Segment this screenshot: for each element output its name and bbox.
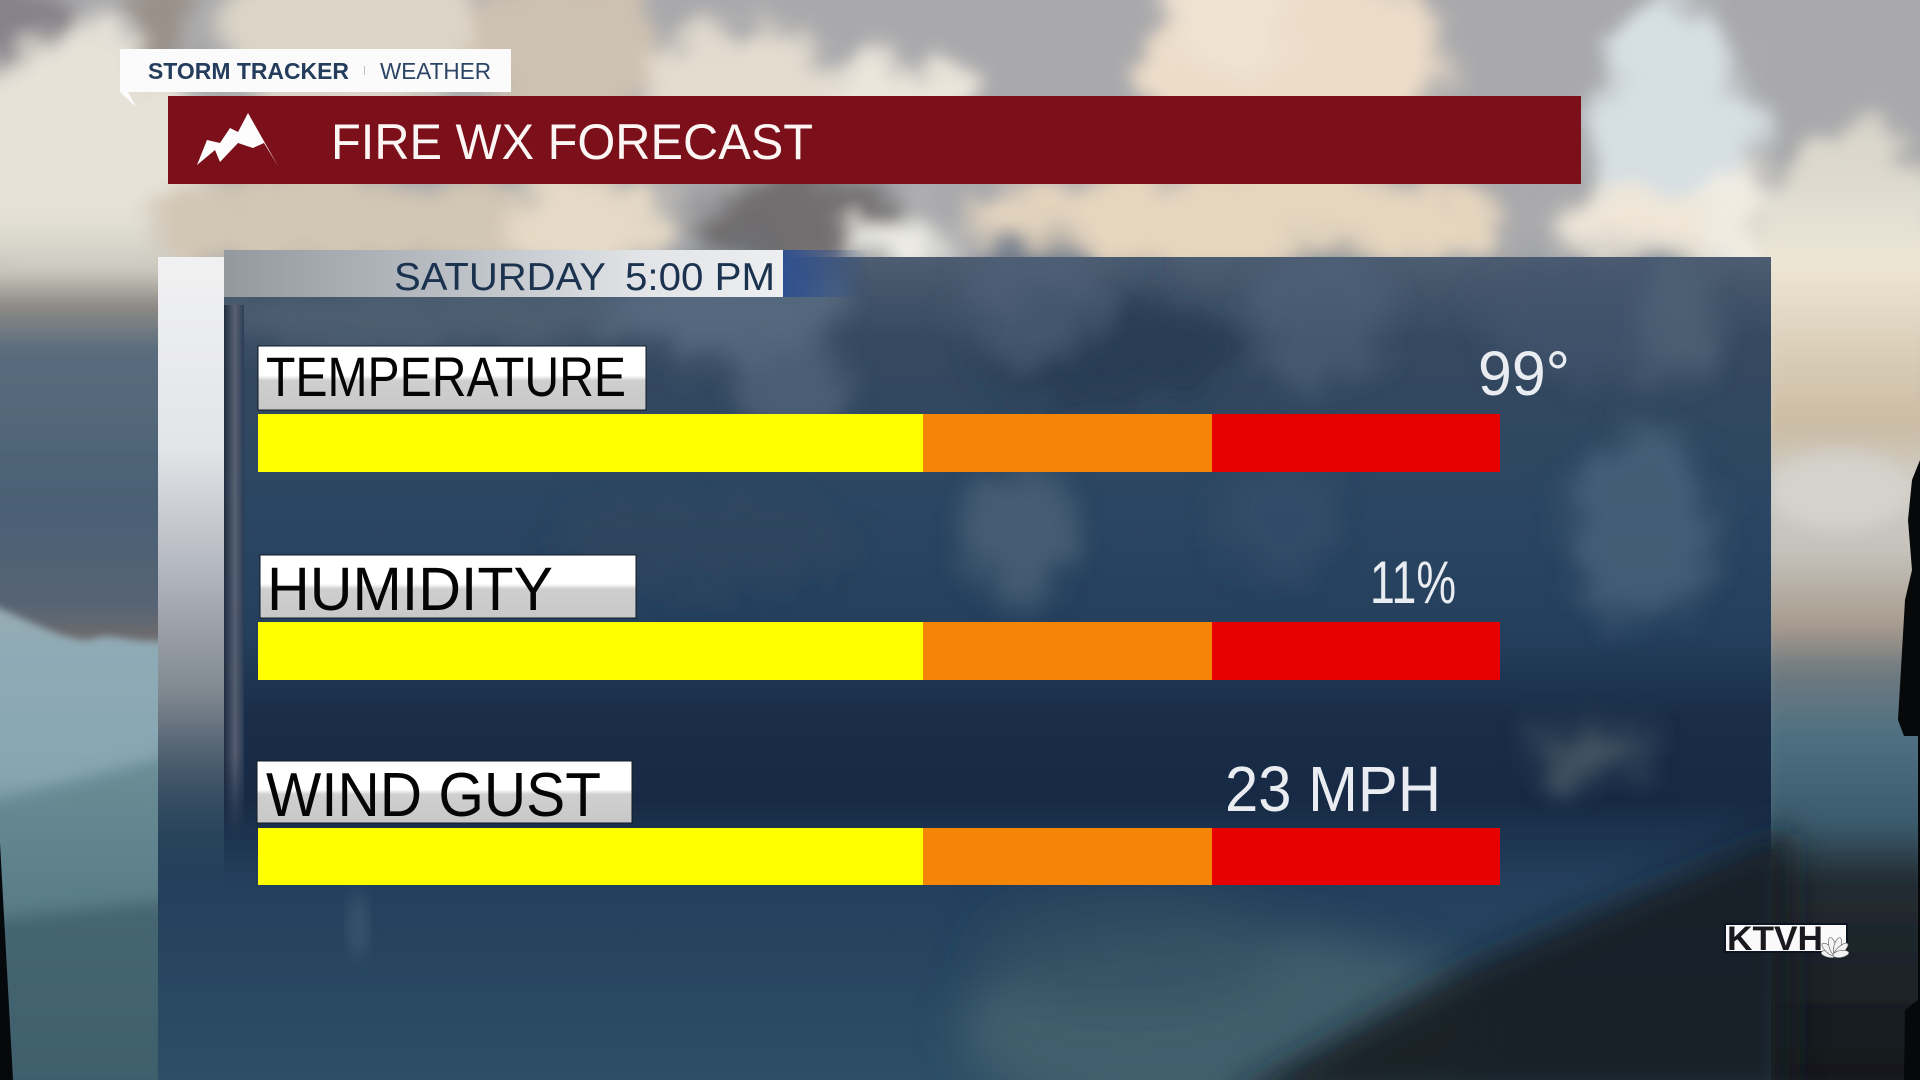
row: humidity <box>258 549 1500 680</box>
date strip: saturday 5:00 pm <box>224 250 868 299</box>
smoke plume clouds <box>0 0 1920 430</box>
black photo edge right <box>1898 460 1920 1080</box>
scale bar: temperature <box>258 414 1500 472</box>
tag: storm tracker weather: WEATHER <box>380 58 491 84</box>
far hillside left <box>0 756 170 1080</box>
icon: mountain peak <box>197 113 279 167</box>
value: 23 mph: 23 MPH <box>1225 753 1441 825</box>
right side smoke column <box>1762 170 1920 1080</box>
title text: FIRE WX FORECAST <box>331 114 813 170</box>
smoke billows behind the panel <box>210 240 1720 776</box>
icon: peacock <box>1820 937 1850 959</box>
value: 99 degrees: 99° <box>1478 339 1570 409</box>
date strip: saturday 5:00 pm: 5:00 PM <box>625 256 775 299</box>
smoke wisp near bottom left <box>351 891 365 959</box>
date strip: saturday 5:00 pm: SATURDAY <box>394 256 606 299</box>
row: wind gust <box>257 753 1500 885</box>
scale bar: wind gust <box>258 828 1500 885</box>
white vertical strip at panel left <box>158 257 224 897</box>
scale bar: humidity <box>258 622 1500 680</box>
tag: storm tracker weather <box>120 49 511 107</box>
panel: translucent navy forecast panel <box>158 240 1790 1080</box>
left smoke underside <box>0 200 170 641</box>
forest through the panel <box>960 890 1500 1080</box>
row: temperature <box>258 339 1570 472</box>
black photo edge left <box>0 843 13 1080</box>
value: 11 percent: 11% <box>1370 549 1456 616</box>
title banner: fire wx forecast <box>168 96 1581 184</box>
dark vertical strip beside white strip <box>224 305 244 835</box>
logo: KTVH with peacock: KTVH <box>1727 920 1823 958</box>
tag: storm tracker weather: STORM TRACKER <box>148 58 349 84</box>
label: temperature: TEMPERATURE <box>266 345 626 408</box>
label: wind gust: WIND GUST <box>266 761 601 830</box>
label: humidity: HUMIDITY <box>267 555 553 623</box>
